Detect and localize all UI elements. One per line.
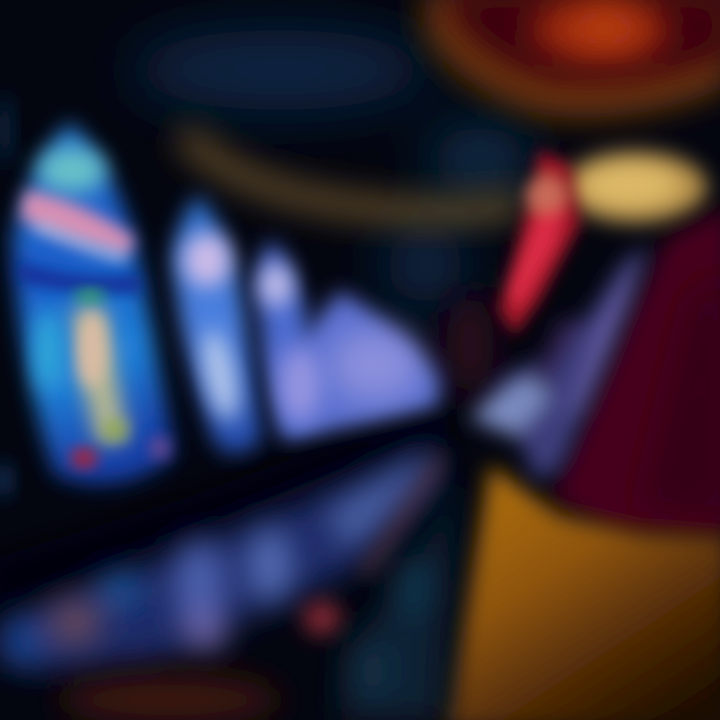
stained glass window 4 [272, 290, 440, 435]
brown bottom glow [60, 674, 280, 720]
diagonal purple and grey railing [470, 245, 650, 480]
pale pink glow [183, 233, 231, 287]
red dot [71, 448, 97, 468]
reflected windows on the floor [0, 445, 440, 670]
maroon wall [552, 205, 720, 535]
top right lamp dome [425, 0, 720, 117]
gold floor panel [445, 465, 720, 720]
red streak [498, 150, 580, 335]
teal dark column reflection [340, 470, 455, 720]
cream figure [72, 308, 128, 445]
mauve right dot [150, 437, 170, 459]
yellow accent [103, 420, 127, 440]
stained glass window 2 [172, 195, 262, 454]
left edge blue glints [0, 94, 13, 496]
pink band [20, 190, 135, 255]
dark floor shadow band [0, 415, 450, 610]
stained glass window 1 [12, 122, 175, 484]
red reflection spot [302, 600, 342, 636]
pale glow [260, 264, 292, 306]
pale upper glow [38, 148, 106, 192]
rust streak beside gold panel [365, 460, 440, 575]
pale lower glow [196, 327, 244, 423]
teal side [34, 310, 62, 390]
dark centre maroon patch [446, 295, 494, 395]
reflection highlights [5, 450, 435, 664]
dark blue band [15, 262, 142, 293]
brown curved arc [190, 140, 510, 212]
gold glowing oval [563, 151, 707, 223]
dark blue ceiling haze [130, 30, 530, 305]
white band edge [35, 225, 125, 258]
stained glass window 3 [255, 240, 320, 440]
green accent [75, 289, 105, 303]
